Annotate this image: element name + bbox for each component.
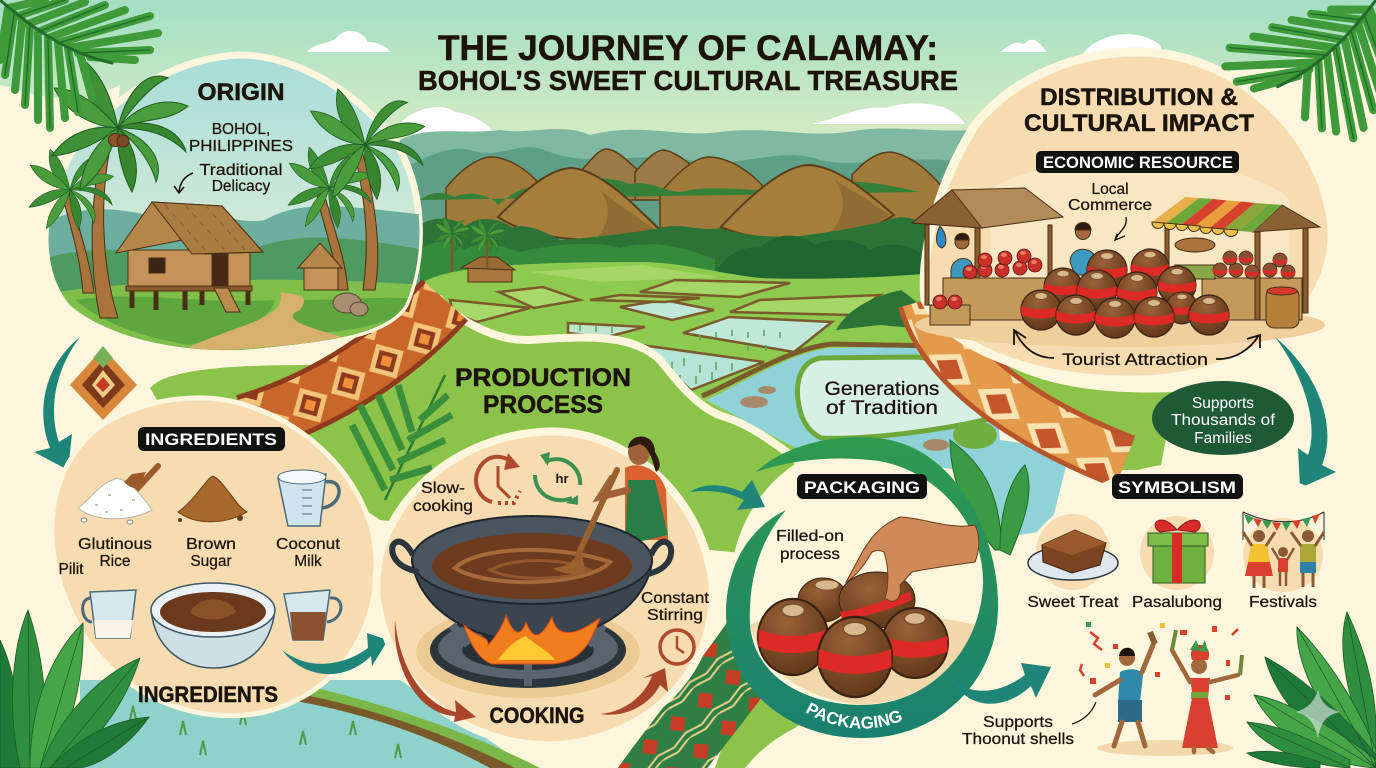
local commerce label [1068, 181, 1152, 240]
cooking caption: COOKING [490, 703, 584, 728]
arrow: distribution to symbolism [1275, 337, 1336, 488]
small green island [953, 421, 997, 449]
supports label [962, 702, 1096, 748]
main stilt hut [116, 202, 263, 312]
sparkle watermark [1296, 690, 1340, 738]
origin scenery [40, 206, 425, 352]
pool island [797, 357, 985, 438]
distribution heading [1024, 84, 1254, 137]
title [418, 29, 958, 96]
panel: origin: PHILIPPINES [189, 138, 293, 155]
paddies [450, 280, 880, 390]
panel: origin: Delicacy [212, 178, 271, 195]
flame core [498, 636, 555, 660]
icon: slow-cooking clock [476, 453, 520, 503]
frond: top left [0, 0, 158, 128]
tree clump near river [836, 290, 935, 330]
green ground band [150, 297, 820, 560]
packaging badge [797, 474, 927, 499]
distant mountains [400, 128, 985, 300]
confetti [1080, 622, 1238, 700]
landscape: mountains, chocolate hills, forest and rice terraces [400, 128, 985, 450]
heading: production process [455, 364, 631, 419]
plant behind symbolism [950, 440, 1029, 555]
ingredients badge [138, 427, 285, 451]
right stall goods [1213, 251, 1295, 279]
constant stirring label: Stirring [647, 607, 703, 624]
filled-on label: Filled-on [776, 528, 844, 545]
bottom rice water [80, 680, 540, 768]
small hut [298, 243, 342, 290]
ingredient labels: Brown [186, 536, 236, 553]
plant behind production [352, 375, 452, 500]
plant: bottom right [1247, 612, 1376, 768]
frond: top right [1218, 0, 1376, 161]
constant stirring label [641, 590, 710, 624]
ingredient labels: Coconut [276, 536, 341, 553]
batik band bottom [645, 635, 762, 768]
river upper bank [702, 344, 940, 396]
supports label: Thoonut shells [962, 731, 1074, 748]
icon: dancers [1095, 630, 1242, 756]
heading: production process: PROCESS [483, 391, 603, 419]
title: THE JOURNEY OF CALAMAY: [438, 29, 938, 68]
back hills [582, 149, 695, 200]
coconut shells [758, 572, 948, 697]
icon: sweet treat [1028, 514, 1118, 590]
river [706, 345, 1070, 540]
callout: supports thousands of families [1152, 381, 1294, 455]
icon: pasalubong gift [1140, 516, 1214, 590]
bottom right ground [715, 680, 830, 768]
red arrow right [600, 668, 668, 715]
front forest [420, 217, 985, 295]
supports label: Supports [983, 714, 1053, 731]
slow-cooking label: cooking [413, 498, 473, 515]
ingredient labels: Glutinous [78, 536, 152, 553]
icon: wok on stove [392, 470, 671, 688]
label: generations of tradition: of Tradition [826, 398, 938, 419]
icon: left small cup [83, 590, 136, 638]
right market stall [1152, 197, 1320, 328]
symbolism badge: SYMBOLISM [1118, 478, 1236, 497]
panel: distribution [912, 52, 1332, 380]
icon: stirring clock [660, 630, 694, 664]
packaging spiral ring [726, 437, 998, 738]
batik band right [925, 300, 1125, 462]
ingredient labels: Rice [99, 553, 131, 570]
batik band left [245, 300, 445, 425]
ingredient labels: Milk [294, 553, 322, 570]
origin note: Traditional [200, 162, 282, 179]
callout: supports thousands of families: Thousands of [1171, 412, 1276, 429]
title: BOHOL’S SWEET CULTURAL TREASURE [418, 65, 958, 96]
packaging curved caption [803, 711, 922, 728]
ingredient labels [59, 536, 341, 578]
river rocks [740, 386, 949, 451]
local commerce label: Local [1091, 181, 1129, 198]
symbol labels: Pasalubong [1132, 594, 1222, 611]
green slope under distribution [960, 335, 1175, 470]
filled-on label [776, 528, 844, 563]
calamay coconuts pile [1021, 249, 1229, 338]
red arrow left [395, 620, 476, 722]
ingredients caption: INGREDIENTS [138, 682, 278, 707]
background sky [0, 0, 1376, 200]
economic resource badge: ECONOMIC RESOURCE [1043, 153, 1233, 172]
label: generations of tradition: Generations [824, 379, 940, 400]
arrow: origin to ingredients [34, 337, 80, 470]
cream edge of ground band [438, 297, 792, 456]
icon: measuring cup coconut milk [278, 470, 339, 526]
constant stirring label: Constant [641, 590, 710, 607]
panel: cooking [376, 431, 713, 745]
symbolism badge [1112, 474, 1243, 499]
plant: bottom left [0, 610, 149, 768]
distribution heading: DISTRIBUTION & [1040, 84, 1238, 111]
back forest [420, 178, 920, 205]
hand [846, 517, 979, 601]
hut in valley [461, 257, 515, 282]
filled-on label: process [780, 546, 840, 563]
distribution heading: CULTURAL IMPACT [1024, 110, 1254, 137]
icon: flames [464, 615, 600, 664]
left market stall [912, 188, 1063, 325]
icon: festivals group [1243, 512, 1324, 592]
valley palms [435, 217, 505, 272]
label: generations of tradition [824, 379, 940, 419]
panel: packaging: PACKAGING [806, 702, 902, 729]
panel: packaging [726, 437, 998, 738]
tourist attraction label with arrows: Tourist Attraction [1062, 350, 1208, 369]
arrow: packaging to symbolism [950, 663, 1051, 704]
origin heading: ORIGIN [198, 79, 284, 106]
clouds [307, 31, 1161, 135]
field base [420, 262, 985, 450]
icon: rice [78, 466, 158, 524]
icon: brown sugar [178, 476, 247, 522]
slow-cooking label [413, 480, 473, 515]
icon: woman stirring [600, 436, 668, 545]
origin location: BOHOL, [212, 121, 270, 138]
local commerce label: Commerce [1068, 197, 1152, 214]
panel: symbolism [962, 462, 1376, 768]
ingredient labels: Sugar [190, 553, 232, 570]
arrow: ingredients to cooking [282, 633, 388, 674]
icon: batik ornament [70, 346, 137, 420]
slow-cooking label: Slow- [421, 480, 465, 497]
symbol labels: Festivals [1249, 594, 1317, 611]
callout: supports thousands of families: Families [1194, 430, 1252, 447]
icon: hr cycle: hr [556, 471, 568, 486]
heading: production process: PRODUCTION [455, 364, 631, 392]
icon: mixing bowl [151, 583, 275, 668]
tourist attraction label with arrows [1014, 330, 1260, 369]
rocks [333, 293, 368, 316]
rice sprouts [580, 325, 780, 384]
ingredient labels: Pilit [59, 561, 84, 578]
vendor [1070, 222, 1097, 275]
symbol labels: Sweet Treat [1028, 594, 1119, 611]
arrow: note to hut [174, 173, 193, 193]
arrow: cooking to packaging [690, 480, 765, 510]
ingredients badge: INGREDIENTS [145, 430, 277, 449]
icon: hr cycle [535, 452, 580, 505]
big chocolate hills [498, 165, 894, 240]
palm trees [29, 62, 425, 318]
icon: right small cup [284, 590, 341, 640]
panel: origin [29, 55, 425, 352]
callout: supports thousands of families: Supports [1192, 395, 1254, 412]
left stall goods [933, 249, 1042, 309]
symbol labels [1028, 594, 1317, 611]
panel: ingredients [52, 398, 376, 716]
packaging badge: PACKAGING [804, 478, 920, 497]
